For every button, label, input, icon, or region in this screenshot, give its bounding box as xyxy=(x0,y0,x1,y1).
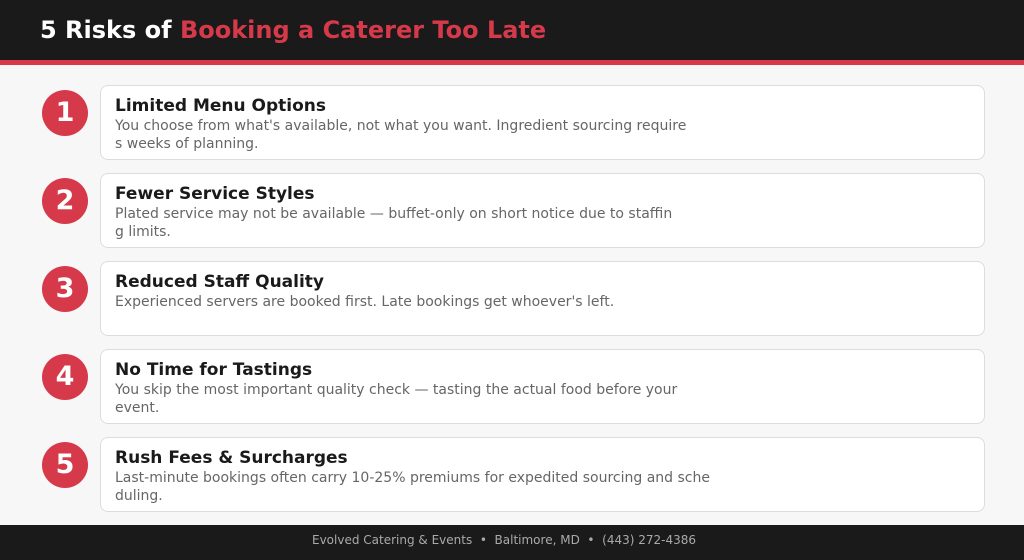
risk 4 xyxy=(42,349,985,424)
number badge 4 xyxy=(42,354,88,400)
card 1 xyxy=(100,85,985,160)
number badge 4: 4 xyxy=(56,361,74,392)
number badge 3 xyxy=(42,266,88,312)
number badge 3: 3 xyxy=(56,273,74,304)
risk 1 xyxy=(42,85,985,160)
card 5 xyxy=(100,437,985,512)
number badge 1 xyxy=(42,90,88,136)
risk 2 xyxy=(42,173,985,248)
card 2: Fewer Service Styles xyxy=(115,184,315,204)
card 2: g limits. xyxy=(115,224,171,240)
risk 3 xyxy=(42,261,985,336)
card 5: Last-minute bookings often carry 10-25% premiums for expedited sourcing and sche xyxy=(115,470,710,486)
title: 5 Risks of Booking a Caterer Too Late xyxy=(40,16,546,44)
header xyxy=(0,0,1024,65)
number badge 5: 5 xyxy=(56,449,74,480)
number badge 2: 2 xyxy=(56,185,74,216)
card 5: duling. xyxy=(115,488,163,504)
footer xyxy=(0,525,1024,560)
number badge 5 xyxy=(42,442,88,488)
card 4: No Time for Tastings xyxy=(115,360,312,380)
card 4 xyxy=(100,349,985,424)
card 5: Rush Fees & Surcharges xyxy=(115,448,348,468)
card 3 xyxy=(100,261,985,336)
card 2: Plated service may not be available — buffet-only on short notice due to staffin xyxy=(115,206,672,222)
number badge 1: 1 xyxy=(56,97,74,128)
card 3: Reduced Staff Quality xyxy=(115,272,324,292)
card 2 xyxy=(100,173,985,248)
footer: Evolved Catering & Events • Baltimore, MD • (443) 272-4386 xyxy=(312,533,696,547)
card 1: Limited Menu Options xyxy=(115,96,326,116)
card 4: event. xyxy=(115,400,159,416)
number badge 2 xyxy=(42,178,88,224)
risk 5 xyxy=(42,437,985,512)
card 1: You choose from what's available, not what you want. Ingredient sourcing require xyxy=(115,118,686,134)
card 4: You skip the most important quality check — tasting the actual food before your xyxy=(115,382,677,398)
card 1: s weeks of planning. xyxy=(115,136,258,152)
card 3: Experienced servers are booked first. Late bookings get whoever's left. xyxy=(115,294,614,310)
